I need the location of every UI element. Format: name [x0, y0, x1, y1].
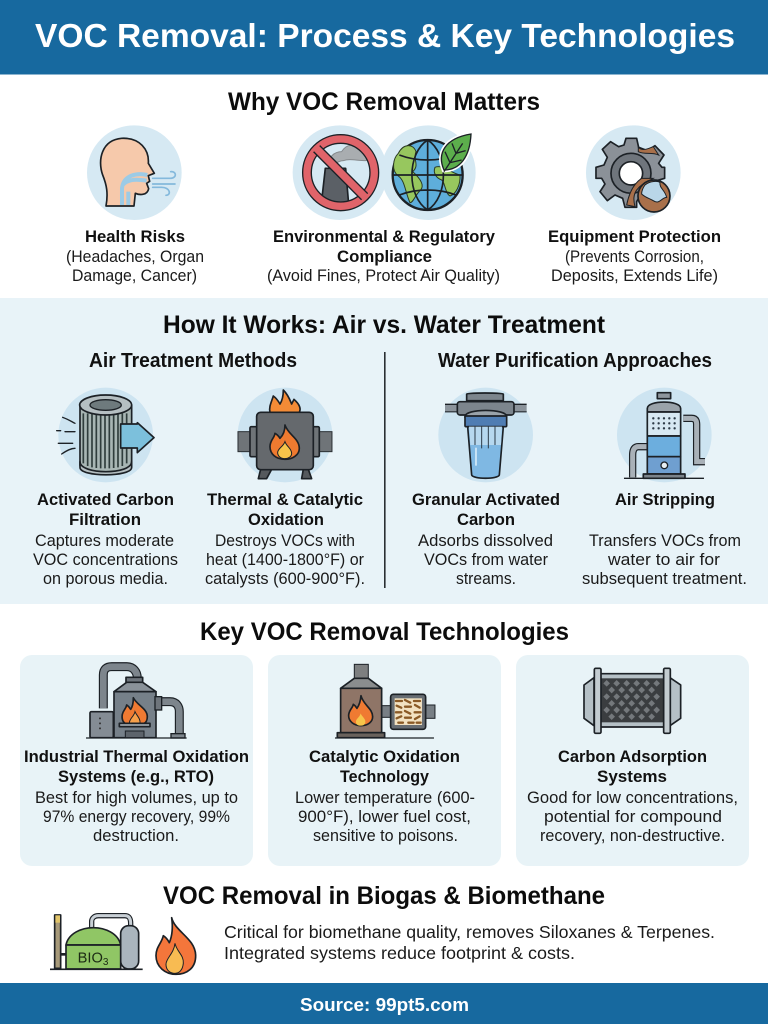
- footer: source: Source: 99pt5.com: [300, 995, 469, 1015]
- title banner: VOC Removal: Process & Key Technologies: [35, 17, 735, 54]
- icon: industrial oxidizer: [86, 667, 187, 738]
- card text: Carbon Adsorption: [558, 747, 707, 766]
- biogas description: [224, 922, 715, 963]
- card text: [24, 747, 249, 845]
- icon: human head breathing: [87, 125, 182, 220]
- card text: 900°F), lower fuel cost,: [298, 808, 471, 826]
- method: thermal and catalytic oxidation: catalysts (600-900°F).: [205, 570, 365, 588]
- icon: carbon adsorption bed: [584, 668, 681, 733]
- card text: Systems (e.g., RTO): [58, 767, 214, 786]
- card text: Catalytic Oxidation: [309, 747, 460, 766]
- method: granular activated carbon: [412, 490, 560, 588]
- heading: why it matters: Why VOC Removal Matters: [228, 88, 540, 116]
- card text: Best for high volumes, up to: [35, 789, 238, 807]
- method: air stripping: Transfers VOCs from: [589, 532, 741, 550]
- item: equipment protection: [548, 227, 721, 285]
- method: thermal and catalytic oxidation: Destroys VOCs with: [215, 532, 355, 550]
- label: BIO3: BIO: [78, 950, 103, 966]
- card: industrial thermal oxidation: [20, 655, 253, 866]
- heading: how it works: How It Works: Air vs. Water Treatment: [163, 311, 606, 339]
- method: granular activated carbon: VOCs from water: [424, 551, 548, 569]
- method: thermal and catalytic oxidation: Oxidation: [248, 510, 324, 529]
- method: activated carbon filtration: Activated Carbon: [37, 490, 174, 509]
- section: biogas and biomethane: [50, 882, 715, 974]
- method: activated carbon filtration: VOC concentrations: [33, 551, 178, 569]
- method: granular activated carbon: Carbon: [457, 510, 515, 529]
- card text: [295, 747, 475, 845]
- biogas description: Critical for biomethane quality, removes Siloxanes & Terpenes.: [224, 922, 715, 942]
- title banner: [0, 0, 768, 74]
- panel: how it works: [0, 298, 768, 604]
- card text: Good for low concentrations,: [527, 789, 738, 807]
- item: environmental and regulatory compliance: Compliance: [337, 247, 432, 266]
- method: thermal and catalytic oxidation: heat (1400-1800°F) or: [206, 551, 364, 569]
- item: environmental and regulatory compliance: (Avoid Fines, Protect Air Quality): [267, 267, 500, 285]
- card text: Technology: [340, 767, 430, 786]
- icon: biogas digester: [50, 915, 143, 969]
- icon: carbon filter: [57, 388, 154, 482]
- card text: destruction.: [93, 827, 179, 845]
- card text: Lower temperature (600-: [295, 789, 475, 807]
- method: air stripping: subsequent treatment.: [582, 570, 747, 588]
- heading: biogas: VOC Removal in Biogas & Biomethane: [163, 882, 605, 910]
- method: thermal and catalytic oxidation: Thermal & Catalytic: [207, 490, 363, 509]
- icon: catalytic reactor: [335, 664, 435, 738]
- icon: globe with leaf: [381, 125, 476, 220]
- item: equipment protection: Equipment Protection: [548, 227, 721, 246]
- method: air stripping: [582, 490, 747, 588]
- method: granular activated carbon: Granular Activated: [412, 490, 560, 509]
- card text: potential for compound: [544, 808, 722, 826]
- icon: corroded gear: [586, 125, 681, 220]
- icon: no smokestack: [293, 125, 387, 220]
- method: activated carbon filtration: [33, 490, 178, 588]
- footer: source: [0, 983, 768, 1024]
- method: thermal and catalytic oxidation: [205, 490, 365, 588]
- method: granular activated carbon: Adsorbs dissolved: [418, 532, 553, 550]
- section: why VOC removal matters: [66, 88, 721, 285]
- icon: thermal oxidizer: [238, 388, 332, 482]
- card text: Industrial Thermal Oxidation: [24, 747, 249, 766]
- card: carbon adsorption: [516, 655, 749, 866]
- card text: 97% energy recovery, 99%: [43, 808, 230, 826]
- item: health risks: [66, 227, 204, 285]
- icon: air stripping tower: [617, 388, 712, 482]
- item: equipment protection: (Prevents Corrosion,: [565, 248, 704, 266]
- method: air stripping: water to air for: [607, 551, 721, 569]
- item: health risks: Damage, Cancer): [72, 267, 197, 285]
- card text: Systems: [597, 767, 667, 786]
- method: activated carbon filtration: Filtration: [69, 510, 141, 529]
- heading: key technologies: Key VOC Removal Technologies: [200, 618, 569, 646]
- card text: [527, 747, 738, 845]
- icon: flame: [156, 918, 196, 974]
- method: air stripping: Air Stripping: [615, 490, 715, 509]
- card text: sensitive to poisons.: [313, 827, 458, 845]
- item: health risks: Health Risks: [85, 227, 185, 246]
- item: equipment protection: Deposits, Extends Life): [551, 267, 718, 285]
- biogas description: Integrated systems reduce footprint & costs.: [224, 943, 575, 963]
- item: health risks: (Headaches, Organ: [66, 248, 204, 266]
- icon: water filter cartridge: [438, 388, 533, 482]
- label: BIO3: 3: [103, 957, 109, 968]
- item: environmental and regulatory compliance: Environmental & Regulatory: [273, 227, 496, 246]
- method: activated carbon filtration: Captures moderate: [35, 532, 174, 550]
- method: granular activated carbon: streams.: [456, 570, 516, 588]
- subheading: water purification: Water Purification Approaches: [438, 350, 712, 372]
- card text: recovery, non-destructive.: [540, 827, 725, 845]
- item: environmental and regulatory compliance: [267, 227, 500, 285]
- method: activated carbon filtration: on porous media.: [43, 570, 168, 588]
- subheading: air treatment: Air Treatment Methods: [89, 350, 297, 372]
- card: catalytic oxidation: [268, 655, 501, 866]
